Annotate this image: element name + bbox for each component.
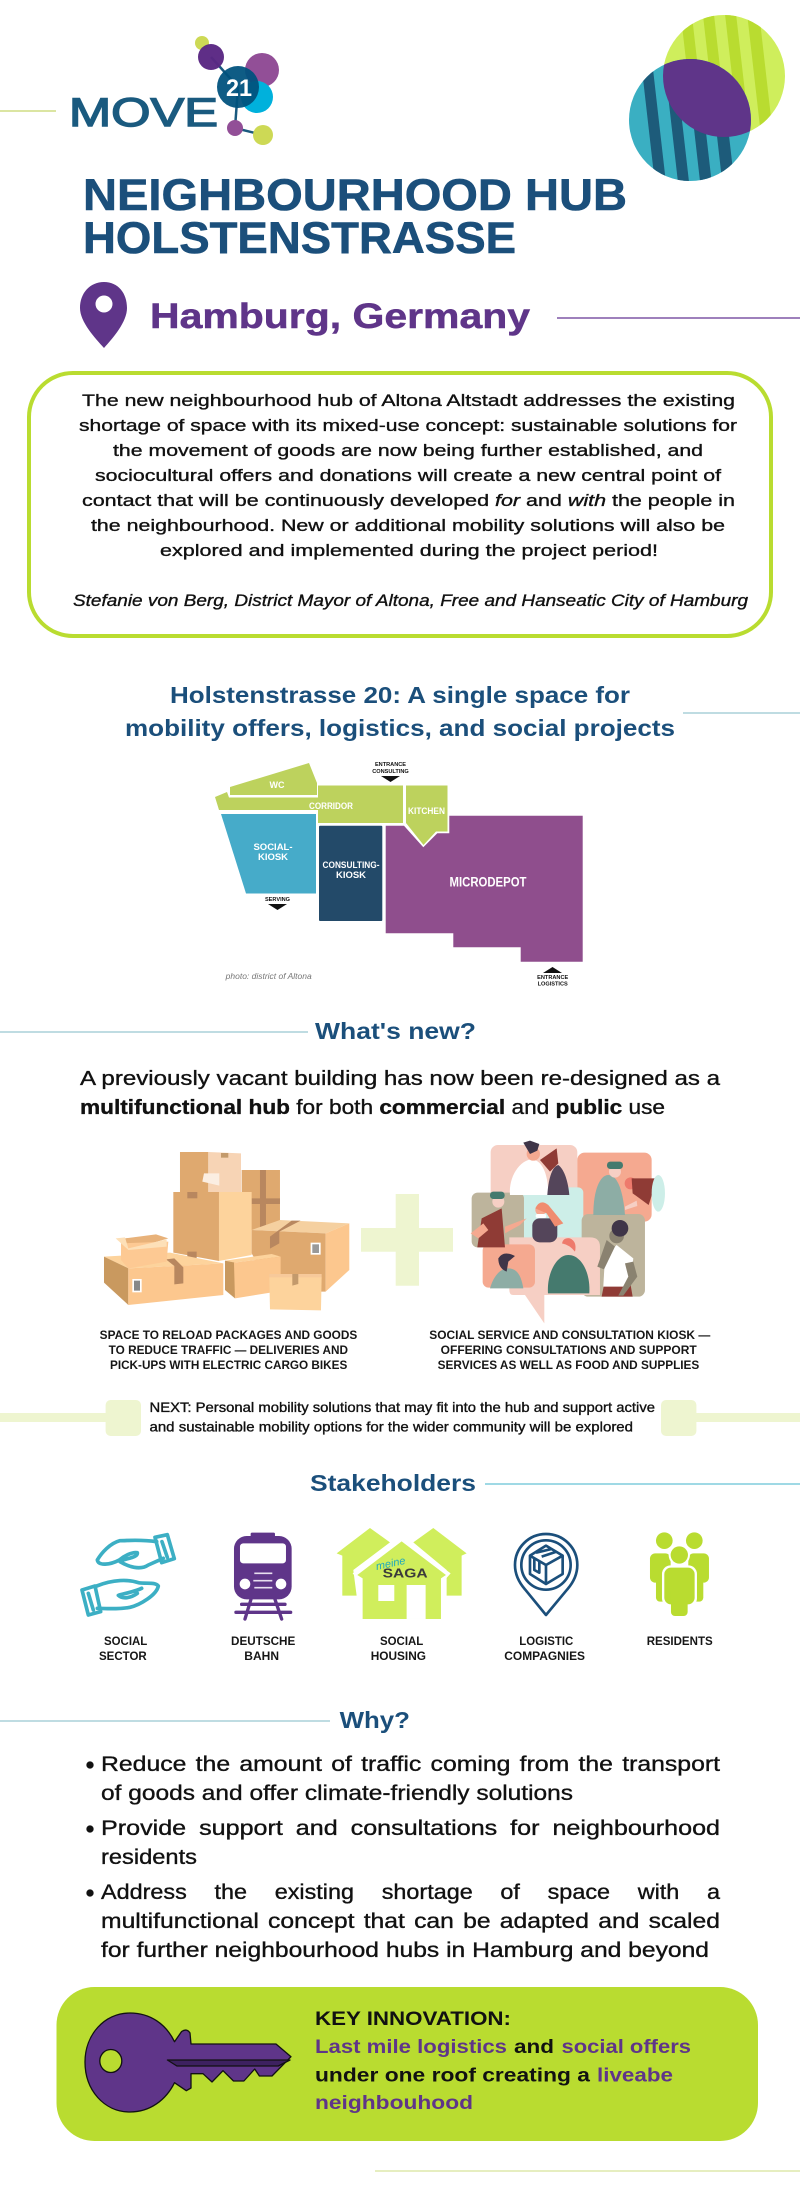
room: social kiosk: SOCIAL- [253,842,293,853]
caption: parcel space: PICK-UPS WITH ELECTRIC CARGO BIKES [110,1360,348,1372]
quote text: the neighbourhood. New or additional mobility solutions will also be [91,516,725,535]
title: NEIGHBOURHOOD HUB [83,171,627,220]
icon: social sector hands [82,1535,174,1615]
next text: and sustainable mobility options for the wider community will be explored [150,1418,633,1434]
photo credit: photo: district of Altona [225,972,312,981]
room: WC: WC [270,780,285,790]
key innovation text: neighbouhood [315,2093,473,2114]
heading: Stakeholders: Stakeholders [310,1470,476,1496]
heading: Why?: Why? [340,1707,410,1733]
caption: social kiosk [429,1330,711,1372]
marker: entrance consulting: CONSULTING [372,769,409,775]
icon: key [85,2013,291,2112]
room: kitchen [406,786,448,845]
person: with megaphone [593,1162,665,1215]
bullet 1: of goods and offer climate-friendly solutions [101,1782,573,1805]
person: man in green jumper [548,1238,589,1293]
stakeholder labels: RESIDENTS [647,1634,713,1648]
bullet 3: for further neighbourhood hubs in Hamburg and beyond [101,1939,709,1962]
list: reasons [86,1753,720,1962]
heading: Holstenstrasse 20: Holstenstrasse 20: A single space for [170,682,630,708]
icon: location pin [80,282,127,348]
caption: parcel space: TO REDUCE TRAFFIC — DELIVERIES AND [109,1345,348,1357]
intro statement [80,1067,721,1119]
caption: parcel space [100,1330,358,1372]
bullet 2 [86,1817,720,1869]
key innovation text: Last mile logistics [315,2037,507,2058]
key innovation text: liveabe [597,2066,673,2086]
quote text: sociocultural offers and donations will create a new central point of [95,466,721,485]
bullet 2: residents [101,1846,197,1869]
floor plan [215,762,583,988]
marker: entrance logistics [537,967,569,988]
logo: meine SAGA [375,1555,428,1580]
room: social kiosk [221,814,316,894]
location heading: Hamburg, Germany [150,297,531,336]
title [83,171,627,263]
stakeholder labels: SOCIAL [380,1634,423,1648]
icon: logistics pin [515,1534,577,1615]
logo: MOVE 21: MOVE [69,91,218,135]
logo: meine SAGA: SAGA [383,1566,428,1580]
stakeholder labels: SECTOR [99,1649,147,1663]
marker: serving [265,897,290,910]
room: consulting kiosk [319,826,382,921]
icon: train [234,1533,292,1619]
panel: mayor quote [29,373,771,636]
person: gesturing man [471,1192,527,1247]
stakeholder labels: HOUSING [371,1649,426,1663]
caption: social kiosk: SOCIAL SERVICE AND CONSULTATION KIOSK — [429,1330,711,1342]
title: HOLSTENSTRASSE [83,214,516,263]
icon: social housing [337,1528,467,1619]
logo: meine SAGA: meine [375,1555,407,1573]
plus sign [361,1194,453,1286]
next text: NEXT: Personal mobility solutions that may fit into the hub and support active [150,1399,655,1415]
quote text: The new neighbourhood hub of Altona Altstadt addresses the existing [82,391,735,410]
stakeholder labels: SOCIAL [104,1634,147,1648]
room: WC [230,763,317,795]
caption: social kiosk: SERVICES AS WELL AS FOOD AND SUPPLIES [438,1360,700,1372]
heading: Holstenstrasse 20 [125,682,800,741]
caption: parcel space: SPACE TO RELOAD PACKAGES AND GOODS [100,1330,358,1342]
stakeholder labels: LOGISTIC [519,1634,574,1648]
quote text: the movement of goods are now being further established, and [113,441,703,460]
room: microdepot: MICRODEPOT [450,874,527,890]
key innovation text: KEY INNOVATION: [315,2009,511,2030]
logo: MOVE 21 [0,36,279,145]
room: social kiosk: KIOSK [258,852,288,863]
panel: key innovation [56,1987,758,2141]
marker: entrance logistics: ENTRANCE [537,975,569,981]
next text [150,1399,655,1434]
intro statement: multifunctional hub for both commercial and public use [80,1096,665,1119]
room: corridor [215,786,403,823]
decorative overlapping striped circles [629,15,785,181]
bullet 1: Reduce the amount of traffic coming from the transport [101,1753,720,1776]
heading: Holstenstrasse 20: mobility offers, logistics, and social projects [125,715,675,741]
bullet 2: Provide support and consultations for neighbourhood [101,1817,720,1840]
key innovation text [315,2009,691,2114]
quote text: contact that will be continuously developed for and with the people in [82,491,735,510]
callout: next steps [0,1399,800,1436]
bullet 3: multifunctional concept that can be adapted and scaled [101,1910,720,1933]
bullet 3 [86,1881,720,1962]
icon: residents [650,1532,709,1617]
captions: services [100,1330,711,1372]
stakeholder labels: BAHN [244,1649,279,1663]
room: consulting kiosk: KIOSK [336,870,366,881]
room: kitchen: KITCHEN [408,806,445,817]
stakeholder labels: DEUTSCHE [231,1634,295,1648]
quote text: shortage of space with its mixed-use concept: sustainable solutions for [79,416,737,435]
intro statement: A previously vacant building has now been re-designed as a [80,1067,721,1090]
marker: entrance logistics: LOGISTICS [538,982,568,988]
room: microdepot [386,816,583,962]
person: woman on phone [597,1220,637,1297]
stakeholder labels [99,1634,713,1663]
key innovation text: social offers [562,2037,691,2058]
stakeholder labels: COMPAGNIES [504,1649,585,1663]
quote text: explored and implemented during the project period! [160,541,658,560]
heading: What's new?: What's new? [315,1018,476,1044]
illustration: stacked parcels [104,1152,349,1310]
logo: MOVE 21: 21 [226,75,252,102]
marker: entrance consulting: ENTRANCE [375,762,406,768]
person: waving woman [490,1253,523,1288]
room: corridor: CORRIDOR [309,801,353,812]
person: woman and companion [510,1141,569,1195]
key innovation text: and [514,2037,554,2058]
room: consulting kiosk: CONSULTING- [322,860,380,871]
person: red-haired woman [532,1202,563,1242]
caption: social kiosk: OFFERING CONSULTATIONS AND SUPPORT [441,1345,697,1357]
marker: serving: SERVING [265,897,290,903]
quote text [79,391,737,560]
marker: entrance consulting [372,762,409,782]
illustration: people in speech bubbles [471,1141,665,1323]
bullet 3: Address the existing shortage of space with a [101,1881,720,1904]
key innovation text: under one roof creating a [315,2066,591,2086]
quote attribution: Stefanie von Berg, District Mayor of Altona, Free and Hanseatic City of Hamburg [73,591,749,610]
bullet 1 [86,1753,720,1805]
